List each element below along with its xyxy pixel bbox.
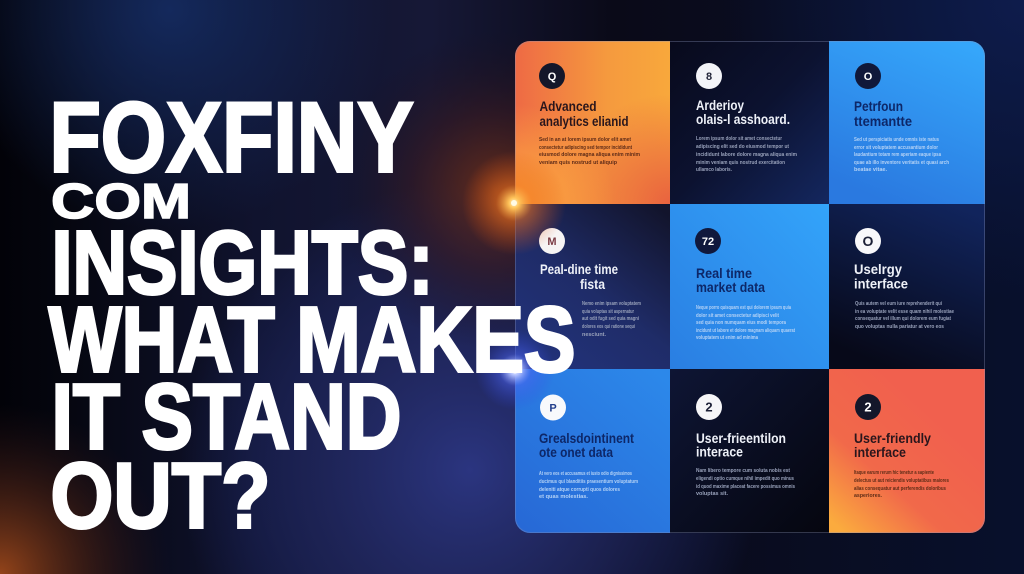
heading: real-time data: Peal-dine time [540, 261, 618, 277]
panel outline [516, 42, 984, 532]
text block: description [696, 468, 795, 497]
text block: description: Nemo enim ipsam voluptatem [582, 301, 641, 307]
text block: description: in ea voluptate velit esse quam nihil molestiae [855, 309, 954, 315]
text block: description: voluptatem ut enim ad minima [696, 335, 759, 341]
text block: description [582, 301, 641, 338]
text block: description: nesciunt. [582, 332, 606, 338]
heading: blue bottom left [540, 433, 634, 457]
text block: description: quia voluptas sit aspernatur [582, 309, 635, 315]
heading: blue top right [854, 101, 912, 126]
heading: real time market data: Real time [696, 265, 752, 281]
text block: description: dolor sit amet consectetur adipisci velit [696, 313, 779, 319]
icon: badge 8 [696, 63, 722, 89]
text block: description: dolores eos qui ratione sequi [582, 324, 635, 330]
card: usability interface [829, 204, 985, 369]
text block: description: ducimus qui blanditiis praesentium voluptatum [539, 479, 638, 485]
light flare: blue [475, 330, 555, 410]
text block: description [854, 470, 949, 499]
text block: description: incididunt labore dolore magna aliqua enim [696, 152, 797, 158]
heading: user-friendly dark [696, 433, 786, 456]
heading: blue top right: ttemantte [854, 113, 912, 129]
text block: description: consequatur vel illum qui dolorem eum fugiat [855, 316, 951, 322]
card: real-time data dark [515, 204, 670, 369]
title: IT STAND [52, 364, 402, 468]
heading: advanced analytics: analytics elianid [540, 113, 628, 129]
text block: description: alias consequatur aut perferendis doloribus [854, 486, 946, 492]
heading: user-friendly interface: interface [854, 444, 906, 460]
icon: badge: P [549, 402, 557, 414]
card: dashboard [670, 41, 829, 204]
heading: advanced analytics [540, 101, 628, 129]
text block: description [696, 136, 797, 173]
heading: user-friendly dark: interace [696, 444, 743, 460]
heading: user-friendly interface [854, 433, 931, 457]
text block: description: et quas molestias. [539, 494, 588, 500]
title: INSIGHTS: [52, 214, 434, 314]
text block: description: eligendi optio cumque nihil impedit quo minus [696, 476, 794, 482]
text block: description [539, 137, 640, 166]
text block: description: error sit voluptatem accusantium dolor [854, 145, 939, 151]
card: blue top right [829, 41, 985, 204]
heading: usability interface: Uselrgy [854, 261, 902, 277]
heading: real time market data [696, 268, 766, 292]
icon: badge 2: 2 [705, 400, 713, 414]
panel: feature grid [515, 41, 985, 533]
text block: description: Sed ut perspiciatis unde omnis iste natus [854, 137, 939, 143]
text block: description: eiusmod dolore magna aliqua enim minim [539, 152, 640, 158]
text block: description: Neque porro quisquam est qui dolorem ipsum quia [696, 305, 792, 311]
icon: badge 2 [855, 394, 881, 420]
text block: description: At vero eos et accusamus et iusto odio dignissimos [539, 471, 632, 477]
text block: description [855, 301, 954, 330]
icon: badge 8: 8 [706, 71, 712, 83]
title: COM [51, 175, 191, 229]
heading: real-time data [540, 264, 618, 289]
text block: description: consectetur adipiscing sed tempor incididunt [539, 145, 632, 151]
text block: description: adipiscing elit sed do eiusmod tempor ut [696, 144, 789, 150]
heading: user-friendly dark: User-frieentilon [696, 430, 786, 446]
text block: description: Lorem ipsum dolor sit amet consectetur [696, 136, 783, 142]
card: user-friendly interface [829, 369, 985, 533]
text block: description: Itaque earum rerum hic tenetur a sapiente [854, 470, 934, 476]
title: OUT? [50, 444, 270, 548]
text block: description: asperiores. [854, 493, 882, 499]
card: user-friendly dark [670, 369, 829, 533]
heading: usability interface: interface [854, 276, 908, 292]
heading: dashboard [696, 100, 790, 124]
heading: dashboard: Arderioy [696, 97, 744, 113]
heading: user-friendly interface: User-friendly [854, 430, 931, 446]
text block: description: laudantium totam rem aperiam eaque ipsa [854, 152, 942, 158]
heading: blue bottom left: Grealsdointinent [539, 430, 634, 446]
heading: real time market data: market data [696, 279, 765, 295]
light flare: orange [462, 151, 566, 255]
icon: badge O: O [863, 233, 874, 249]
text block: description: aut odit fugit sed quia magni [582, 316, 639, 322]
text block: description: ullamco laboris. [696, 167, 732, 173]
heading: advanced analytics: Advanced [540, 98, 596, 114]
text block: description [854, 137, 949, 173]
text block: description [539, 471, 638, 500]
icon: badge [540, 394, 566, 420]
text block: description: sed quia non numquam eius modi tempora [696, 320, 787, 326]
text block: description: quo voluptas nulla pariatur at vero eos [855, 324, 944, 330]
title: FOXFINY [50, 82, 414, 192]
text block: description [696, 305, 795, 341]
text block: description: Sed in an at lorem ipsum dolor elit amet [539, 137, 631, 143]
text block: description: delectus ut aut reiciendis voluptatibus maiores [854, 478, 949, 484]
icon: badge O [855, 63, 881, 89]
card: blue bottom left [515, 369, 670, 533]
title: WHAT MAKES [48, 288, 576, 392]
icon: badge O: O [864, 71, 873, 83]
text block: description: voluptas sit. [696, 491, 728, 497]
icon: badge [539, 228, 565, 254]
heading: blue bottom left: ote onet data [539, 444, 613, 460]
heading: dashboard: olais-l asshoard. [696, 111, 790, 127]
heading: blue top right: Petrfoun [854, 98, 903, 114]
icon: badge Q: Q [548, 71, 557, 83]
card: real time market data [670, 204, 829, 369]
text block: description: Quis autem vel eum iure reprehenderit qui [855, 301, 942, 307]
icon: badge: M [547, 236, 557, 248]
icon: badge O [855, 228, 881, 254]
icon: badge 72 [695, 228, 721, 254]
text block: description: veniam quis nostrud ut aliquip [539, 160, 618, 166]
text block: description: deleniti atque corrupti quos dolores [539, 487, 620, 493]
card: advanced analytics [515, 41, 670, 204]
title [48, 82, 576, 548]
text block: description: Nam libero tempore cum soluta nobis est [696, 468, 790, 474]
text block: description: incidunt ut labore et dolore magnam aliquam quaerat [696, 328, 795, 334]
icon: badge Q [539, 63, 565, 89]
text block: description: minim veniam quis nostrud exercitation [696, 160, 785, 166]
text block: description: id quod maxime placeat facere possimus omnis [696, 484, 795, 490]
heading: usability interface [854, 264, 908, 288]
icon: badge 2: 2 [864, 400, 872, 414]
heading: real-time data: fista [580, 276, 605, 292]
icon: badge 2 [696, 394, 722, 420]
text block: description: quae ab illo inventore veritatis et quasi arch [854, 160, 949, 166]
text block: description: beatae vitae. [854, 167, 887, 173]
icon: badge 72: 72 [702, 236, 714, 248]
